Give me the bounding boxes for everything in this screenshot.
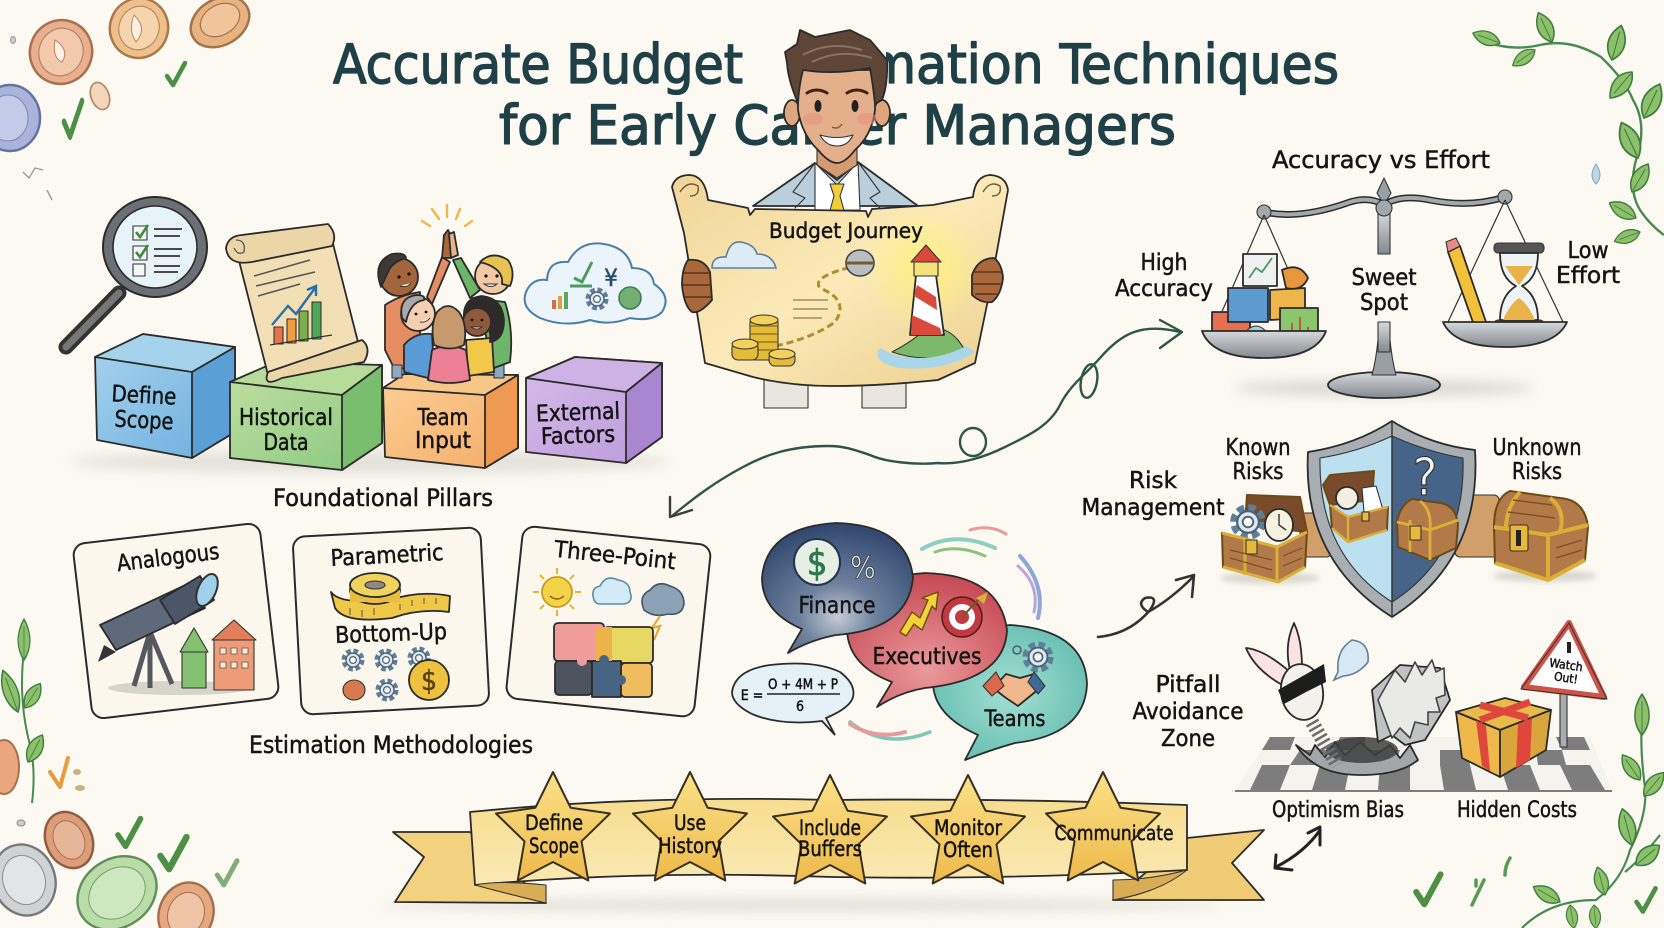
bubble: formula: 6 [796,699,804,715]
labels: Risk [1129,468,1177,494]
bottom-left vine, coins and checks [0,619,237,928]
star: monitor often: Monitor [934,816,1002,840]
card: parametric and bottom-up [292,527,490,715]
icon: balance scale [1202,178,1567,398]
bubble: teams: Teams [984,707,1046,732]
icon: open chest known risks [1220,495,1320,584]
bottom-right vine and checks [1416,694,1664,928]
card: analogous [72,523,280,719]
parchment map [672,175,1008,386]
arrow: to risk panel [1098,575,1194,637]
bubble: executives: Executives [872,644,982,670]
icon: magnifying glass [66,197,207,347]
heading: Accuracy vs Effort [1272,146,1490,174]
labels [1082,435,1582,521]
labels: Zone [1161,726,1215,752]
pillar: team input: Team [417,405,468,431]
pillar: team input: Input [415,428,471,454]
icon: team high five [378,205,513,383]
panel: risk management [1082,421,1597,617]
map cloud [712,242,776,268]
icon: external factors cloud [525,243,666,324]
icon: watch out sign: Watch [1548,656,1584,674]
trousers [764,376,906,408]
heading: Foundational Pillars [273,484,493,512]
pillar: historical data: Data [264,430,308,456]
star: define scope: Scope [529,834,579,858]
card: three-point: Three-Point [552,537,677,575]
star: include buffers: Include [799,816,861,840]
star: include buffers [773,775,887,884]
labels: Low [1568,238,1609,264]
icon: risk shield [1308,421,1476,617]
panel: foundational pillars [66,197,670,512]
panel: stakeholder communication bubbles [732,523,1087,760]
title: Accurate Budget [333,33,743,96]
card: parametric and bottom-up: Parametric [330,540,444,572]
left pan items [1212,254,1318,342]
hands [682,258,1003,312]
icon: watch out sign: Out! [1553,669,1579,687]
star: use history: Use [674,811,706,835]
compass [846,250,874,276]
icon: spring bunny [1246,623,1368,765]
pillar: define scope: Scope [114,406,174,436]
icons: gears and coin [343,649,449,700]
labels: Risks [1512,459,1562,485]
icon: closed chest unknown risks [1493,491,1597,582]
labels: Unknown [1492,435,1582,461]
bubble: formula: E = [741,688,763,704]
card: analogous: Analogous [115,539,221,577]
pillar: external factors: Factors [541,422,615,450]
lighthouse [878,245,975,369]
swooshes [850,528,1040,739]
labels: Hidden Costs [1457,798,1577,823]
star: include buffers: Buffers [798,837,862,861]
star: define scope [496,772,610,880]
right pan items [1446,238,1544,332]
icon: puzzle [554,623,653,697]
icon: sun [533,568,581,616]
icon: gift box [1456,698,1551,777]
star: monitor often [911,775,1025,884]
body and hair: teammate from behind [428,306,470,383]
chest in shield: closed [1397,499,1458,560]
card: parametric and bottom-up: Bottom-Up [335,619,447,649]
labels: Known [1226,435,1290,461]
pillar: external factors: External [536,399,620,427]
gold coin stacks [732,315,795,366]
central character with map [672,30,1008,408]
star: define scope: Define [525,811,583,835]
labels: Management [1082,495,1224,521]
pillar: historical data [230,362,382,470]
labels: Optimism Bias [1272,798,1404,823]
icon: watch out sign [1521,623,1607,747]
star: use history [633,772,747,880]
bubble: formula: O + 4M + P [768,677,838,693]
pillar: external factors [526,357,662,463]
bubble: finance [762,523,913,653]
head: right teammate [475,255,513,294]
pillar: historical data: Historical [239,405,333,431]
pillar: define scope: Define [111,381,177,411]
star: use history: History [658,834,722,858]
pillar: team input [383,374,518,468]
panel: best practices ribbon [380,772,1264,911]
ribbon [380,799,1264,911]
body: left and right teammates [385,230,511,378]
winding path [765,265,860,348]
labels: Spot [1360,290,1408,316]
icon: risk shield: ? [1413,448,1437,508]
title: Estimation Techniques [775,33,1339,96]
top-left coins and checks [0,0,258,200]
star: communicate: Communicate [1054,821,1174,845]
labels [1132,672,1244,752]
map note lines [793,300,828,318]
icon: storm cloud [642,584,684,640]
icon: external factors cloud: ¥ [604,264,618,292]
star: communicate [1046,772,1174,880]
head: left teammate [378,254,418,296]
body and head: grey-haired teammate [401,295,435,378]
labels: Pitfall [1156,672,1220,698]
checkered floor [1235,737,1612,791]
body and head: dark-haired teammate [463,296,504,376]
pillar: define scope [95,334,235,458]
arrow: journey connector [670,320,1182,517]
icon: handshake [983,672,1045,706]
icon: tape measure [331,573,450,620]
title: for Early Career Managers [499,94,1176,157]
back chests [1300,495,1499,557]
panel: estimation methodologies [72,523,711,759]
icons: gears and coin: $ [421,664,437,697]
labels: Risks [1232,459,1284,485]
card: three-point [505,526,711,717]
labels: Avoidance [1132,699,1244,725]
labels: Effort [1556,263,1620,289]
icon: telescope [98,571,252,695]
bubble: executives [847,573,1007,707]
labels: Accuracy [1115,276,1213,302]
icon: bear trap [1296,660,1450,775]
labels [1272,798,1577,823]
map title: Budget Journey [769,219,923,243]
labels: High [1140,250,1188,276]
icon: chart scroll [226,224,368,382]
heading: Estimation Methodologies [249,731,533,759]
panel: pitfall avoidance zone [1132,623,1612,823]
bubble: finance: $ [807,543,827,584]
arrow: double-headed [1275,827,1320,870]
labels: Sweet [1352,265,1416,291]
star: monitor often: Often [943,838,993,862]
floor shadow [70,450,670,474]
title [333,33,1339,157]
panel: accuracy vs effort [1115,146,1620,398]
icon: cloud [593,578,631,604]
bubble: finance: % [850,551,876,586]
top-right vine [1471,10,1664,247]
bubble: teams [933,625,1087,760]
chest in shield: open [1323,471,1388,542]
figure: manager [753,30,918,214]
bubble: finance: Finance [798,593,876,619]
labels [1115,238,1620,320]
icon: buildings [180,620,256,690]
bubble: formula [732,664,853,735]
